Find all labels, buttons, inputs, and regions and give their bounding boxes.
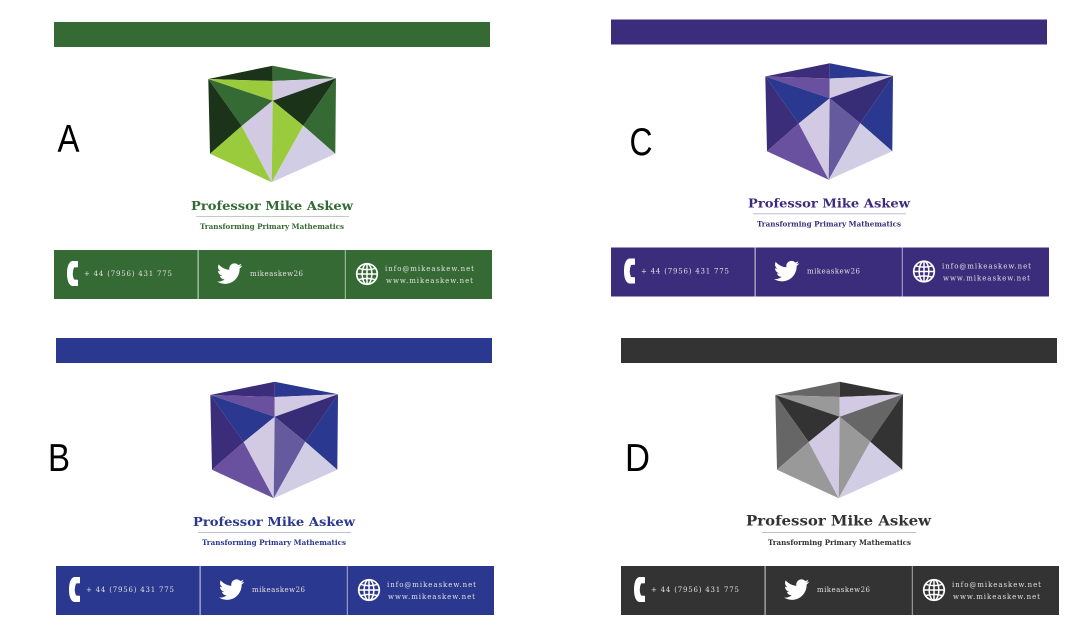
contact footer C: mikeaskew26	[807, 268, 861, 276]
contact footer D: info@mikeaskew.net	[952, 581, 1041, 589]
panel: version A green	[54, 22, 492, 299]
panel: version D charcoal	[621, 338, 1059, 615]
letter A: A	[58, 118, 80, 161]
top colour bar A	[54, 22, 490, 47]
letter C: C	[630, 121, 652, 164]
contact footer A: mikeaskew26	[250, 270, 304, 278]
name C: Professor Mike Askew	[748, 196, 911, 210]
tagline A: Transforming Primary Mathematics	[200, 222, 344, 231]
tagline C: Transforming Primary Mathematics	[757, 220, 901, 228]
top colour bar C	[611, 20, 1047, 44]
contact footer C	[611, 248, 1049, 296]
top colour bar D	[621, 338, 1057, 363]
contact footer A	[54, 250, 492, 299]
name D: Professor Mike Askew	[746, 514, 932, 530]
tagline B: Transforming Primary Mathematics	[202, 538, 346, 547]
contact footer D: + 44 (7956) 431 775	[651, 586, 739, 594]
contact footer C: www.mikeaskew.net	[943, 274, 1030, 282]
logo cube B	[210, 382, 338, 498]
contact footer C: info@mikeaskew.net	[942, 262, 1031, 270]
contact footer D	[621, 566, 1059, 615]
logo cube D	[775, 382, 903, 498]
contact footer A: + 44 (7956) 431 775	[84, 270, 172, 278]
contact footer B: + 44 (7956) 431 775	[86, 586, 174, 594]
contact footer A: info@mikeaskew.net	[385, 265, 474, 273]
name A: Professor Mike Askew	[191, 198, 354, 213]
logo cube A	[208, 66, 336, 182]
contact footer B: info@mikeaskew.net	[387, 581, 476, 589]
contact footer B: mikeaskew26	[252, 586, 306, 594]
contact footer B: www.mikeaskew.net	[388, 593, 475, 601]
panel: version C purple	[611, 20, 1049, 296]
panel: version B blue	[48, 338, 494, 615]
letter D: D	[625, 437, 650, 480]
contact footer D: mikeaskew26	[817, 586, 871, 594]
tagline D: Transforming Primary Mathematics	[768, 538, 911, 547]
contact footer A: www.mikeaskew.net	[386, 277, 473, 285]
contact footer C: + 44 (7956) 431 775	[641, 268, 729, 276]
top colour bar B	[56, 338, 492, 363]
logo cube C	[765, 63, 893, 180]
contact footer D: www.mikeaskew.net	[953, 593, 1040, 601]
contact footer B	[56, 566, 494, 615]
name B: Professor Mike Askew	[193, 514, 356, 529]
letter B: B	[48, 437, 70, 480]
